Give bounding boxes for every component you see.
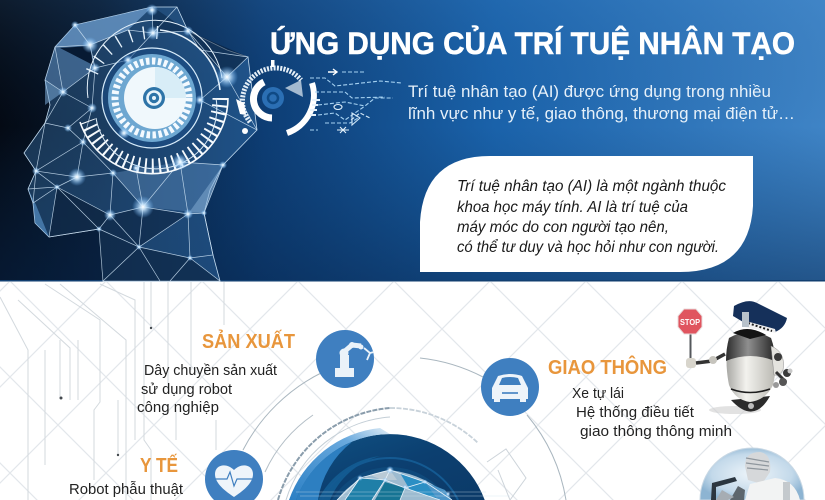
title: ỨNG DỤNG CỦA TRÍ TUỆ NHÂN TẠO xyxy=(270,25,795,61)
circuit lines background xyxy=(0,282,224,500)
head wire mesh xyxy=(28,7,257,281)
intro text xyxy=(408,82,795,123)
icon: car xyxy=(481,358,539,416)
head gear rings xyxy=(80,20,228,174)
label: Sản xuất: Dây chuyền sản xuất xyxy=(144,362,278,379)
illustration: police robot with stop sign: STOP xyxy=(680,318,701,327)
intro text: Trí tuệ nhân tạo (AI) được ứng dụng trong nhiều xyxy=(408,82,771,101)
label: Giao thông: GIAO THÔNG xyxy=(548,355,667,379)
label: Y tế: Y TẾ xyxy=(140,454,178,477)
illustration: polygon AI head xyxy=(24,4,257,281)
label: Giao thông xyxy=(548,355,732,440)
panel: applications section xyxy=(0,282,825,500)
illustration: robot in sphere xyxy=(700,448,804,500)
label: Sản xuất xyxy=(137,330,295,416)
head glowing nodes xyxy=(32,4,238,261)
label: Giao thông: Xe tự lái xyxy=(572,385,624,402)
label: Giao thông: Hệ thống điều tiết xyxy=(576,404,695,421)
panel: header banner xyxy=(0,0,825,282)
chart: central globe xyxy=(289,428,510,500)
intro text: lĩnh vực như y tế, giao thông, thương mại điện tử… xyxy=(408,104,795,123)
label: Giao thông: giao thông thông minh xyxy=(580,423,732,440)
callout: AI definition xyxy=(420,156,753,272)
label: Y tế xyxy=(69,454,184,498)
callout: AI definition: khoa học máy tính. AI là trí tuệ của xyxy=(457,199,688,216)
label: Y tế: Robot phẫu thuật xyxy=(69,481,184,498)
icon: circuit traces xyxy=(310,69,402,133)
callout: AI definition: máy móc do con người tạo nên, xyxy=(457,219,669,236)
icon: robot arm xyxy=(316,330,374,388)
label: Sản xuất: SẢN XUẤT xyxy=(202,330,295,353)
icon: small gear dial xyxy=(236,60,314,134)
illustration: police robot with stop sign xyxy=(678,301,792,414)
callout: AI definition: Trí tuệ nhân tạo (AI) là một ngành thuộc xyxy=(457,178,726,195)
globe mesh xyxy=(337,466,452,500)
callout: AI definition: có thể tư duy và học hỏi như con người. xyxy=(457,239,719,256)
chart: orbit arcs xyxy=(243,358,566,500)
label: Sản xuất: sử dụng robot xyxy=(141,381,233,398)
label: Sản xuất: công nghiệp xyxy=(137,399,219,416)
icon: heart xyxy=(205,450,263,500)
